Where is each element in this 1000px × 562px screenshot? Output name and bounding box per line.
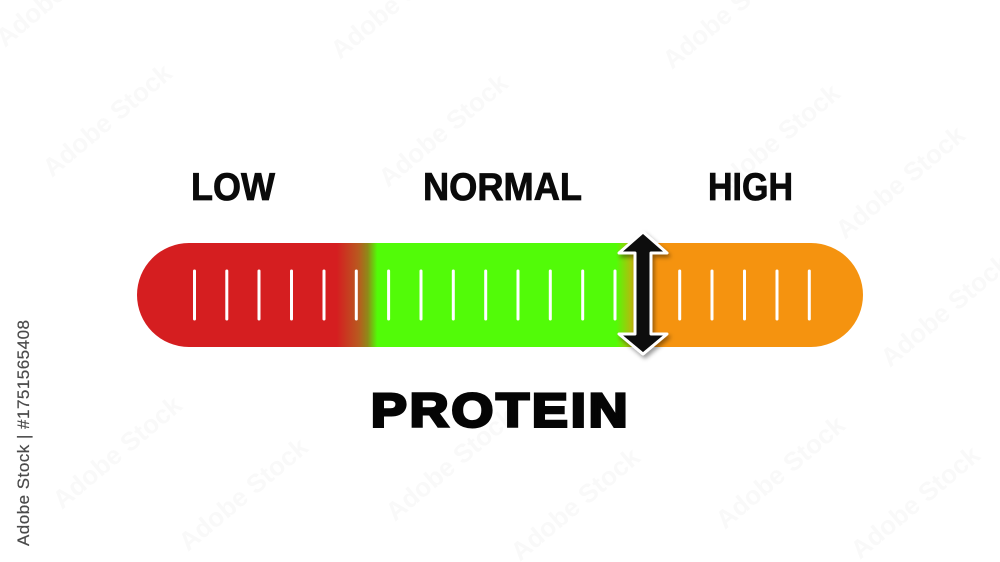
label: LOW: LOW <box>191 166 275 209</box>
watermark pattern: Adobe Stock <box>373 67 514 193</box>
watermark pattern: Adobe Stock <box>830 119 971 245</box>
tick marks <box>194 271 809 319</box>
stock image id side text: Adobe Stock | #1751565408 <box>14 320 33 546</box>
watermark pattern: Adobe Stock <box>47 389 188 515</box>
watermark pattern: Adobe Stock <box>845 439 986 562</box>
title: PROTEIN: PROTEIN <box>371 384 627 437</box>
watermark pattern: Adobe Stock <box>705 77 846 203</box>
watermark pattern: Adobe Stock <box>173 431 314 557</box>
label: HIGH: HIGH <box>708 166 793 209</box>
watermark pattern: Adobe Stock <box>710 409 851 535</box>
gauge bar: red to green to orange <box>137 243 863 347</box>
icon: double-headed arrow marker <box>619 232 667 354</box>
watermark pattern: Adobe Stock <box>37 57 178 183</box>
watermark pattern: Adobe Stock <box>380 401 521 527</box>
label: NORMAL: NORMAL <box>423 166 582 209</box>
